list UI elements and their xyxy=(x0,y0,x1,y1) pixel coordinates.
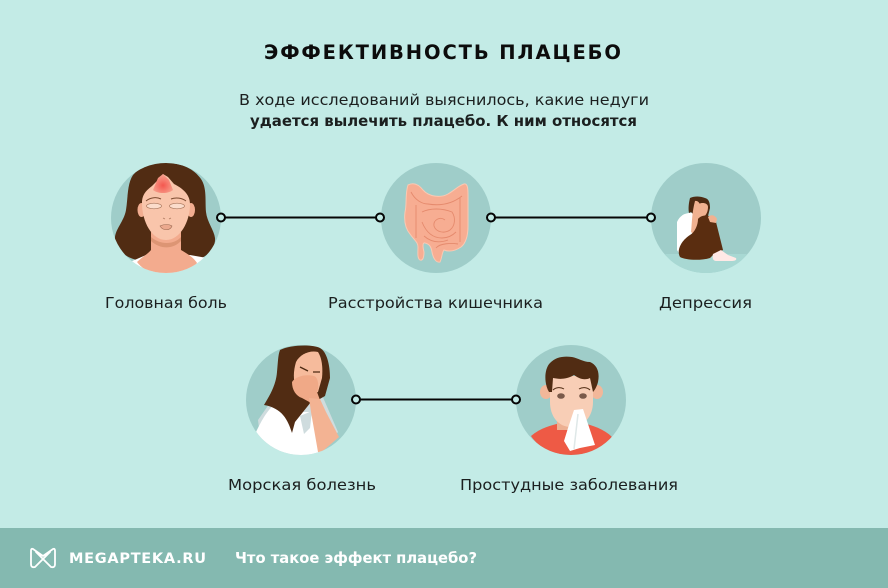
footer band xyxy=(0,528,888,588)
intro text: удается вылечить плацебо. К ним относятся xyxy=(250,112,637,130)
icon: intestines xyxy=(381,163,491,273)
connector: seasickness to cold xyxy=(352,396,520,404)
title: ЭФФЕКТИВНОСТЬ ПЛАЦЕБО xyxy=(264,41,621,64)
icon: woman with seasickness xyxy=(246,345,356,456)
intro text xyxy=(239,91,649,130)
footer question: Что такое эффект плацебо? xyxy=(235,549,477,567)
label: seasickness: Морская болезнь xyxy=(228,476,376,494)
icon: woman with headache xyxy=(111,163,221,276)
intro text: В ходе исследований выяснилось, какие недуги xyxy=(239,91,649,109)
label: cold: Простудные заболевания xyxy=(460,476,678,494)
connector: headache to intestine xyxy=(217,214,384,222)
icon: logo xyxy=(31,549,55,567)
footer brand: MEGAPTEKA.RU xyxy=(69,551,206,567)
label: headache: Головная боль xyxy=(105,294,227,312)
label: depression: Депрессия xyxy=(659,294,752,312)
icon: boy with a cold xyxy=(516,345,626,455)
connector: intestine to depression xyxy=(487,214,655,222)
icon: depressed person xyxy=(651,163,761,273)
label: intestines: Расстройства кишечника xyxy=(328,294,543,312)
